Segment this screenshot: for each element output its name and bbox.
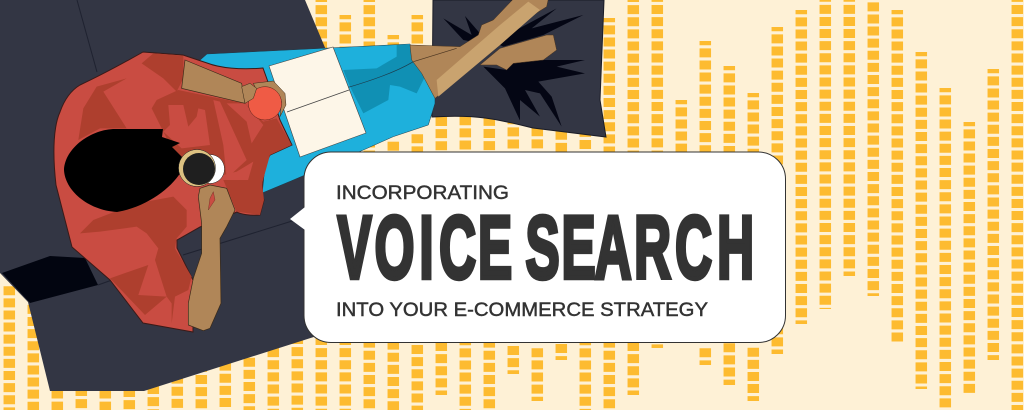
apple: [248, 87, 282, 120]
lower arm and hand: [188, 185, 235, 331]
sofa shadow: [2, 256, 98, 303]
sofa seams: [77, 0, 305, 285]
hair and headphone cup: [64, 129, 224, 212]
main title: VOICE SEARCH: [338, 198, 754, 298]
skirt fold shading: [343, 45, 425, 113]
legs: [410, 0, 557, 98]
speech bubble: [290, 152, 786, 342]
pillow: [432, 0, 606, 137]
leg shadow spikes: [443, 8, 585, 127]
dress: [54, 52, 292, 332]
open book: [269, 47, 366, 157]
heading line 3: INTO YOUR E-COMMERCE STRATEGY: [336, 299, 708, 321]
skirt: [198, 44, 435, 197]
dress shading upper: [78, 53, 292, 188]
upper arm and hand with apple: [182, 60, 286, 120]
person: [54, 0, 557, 332]
dress shading lower: [80, 180, 264, 323]
sofa: [0, 0, 340, 391]
heading line 1: INCORPORATING: [336, 182, 509, 204]
bubble tail: [290, 207, 305, 230]
